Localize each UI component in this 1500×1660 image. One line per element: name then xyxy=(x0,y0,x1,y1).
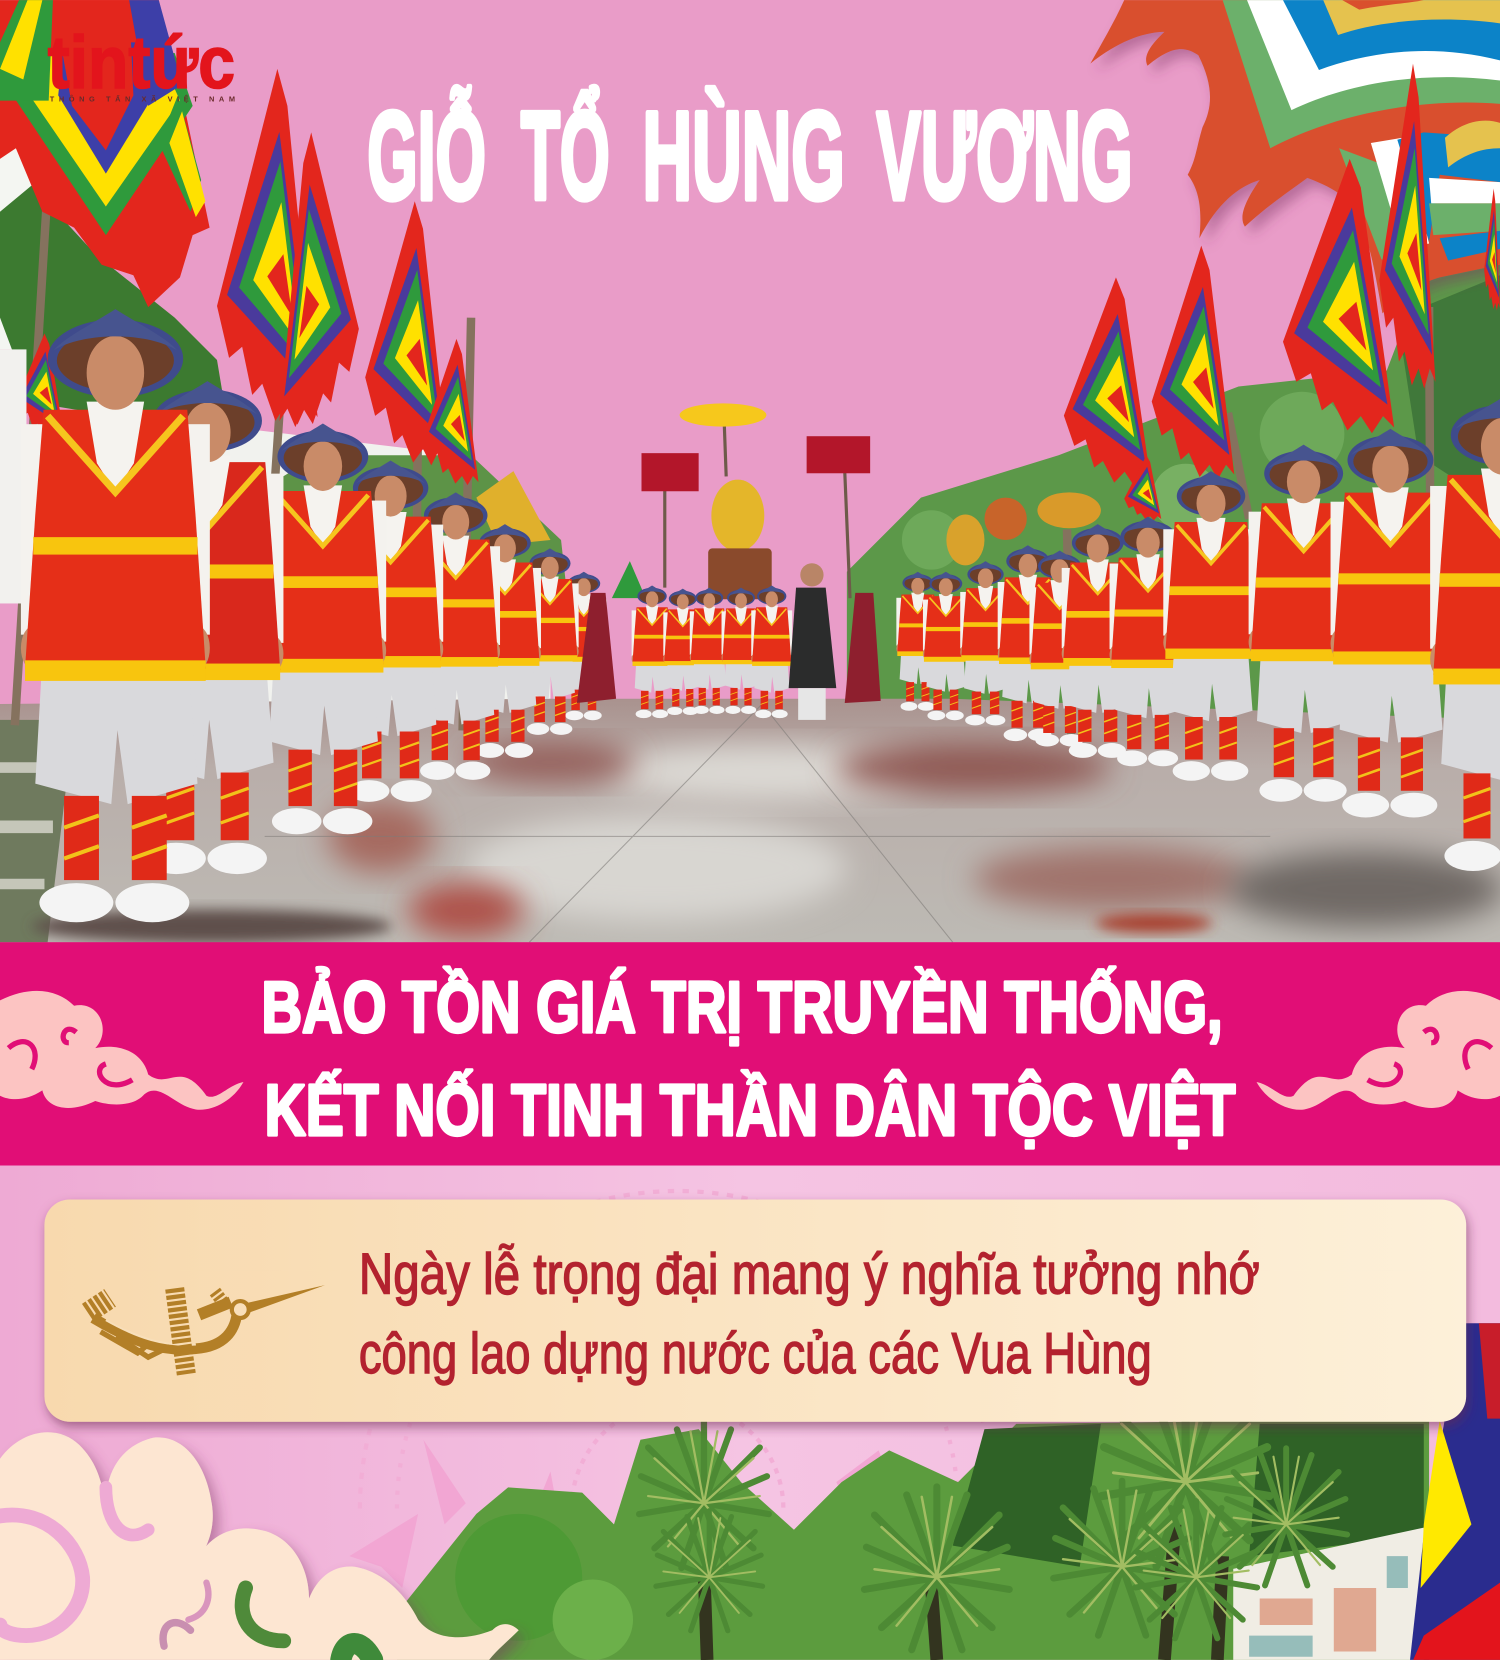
right triangular flags xyxy=(1064,64,1500,520)
lower pink patterned background xyxy=(0,1166,1500,1660)
pavement xyxy=(0,699,1500,943)
left big chevron flag xyxy=(0,0,210,307)
right red banner xyxy=(807,436,870,473)
title: TỔ xyxy=(521,87,610,226)
man in black robe xyxy=(789,563,836,720)
bottom tree photo xyxy=(397,1377,1429,1660)
parasol xyxy=(680,403,766,427)
title: VƯƠNG xyxy=(876,87,1133,226)
card line 2: công lao dựng nước của các Vua Hùng xyxy=(359,1322,1152,1386)
palanquin xyxy=(708,548,772,599)
message card xyxy=(44,1199,1466,1422)
cloud ornament left xyxy=(0,991,243,1110)
flag poles xyxy=(15,101,1431,746)
golden statue xyxy=(711,480,764,552)
subtitle line 1: BẢO TỒN GIÁ TRỊ TRUYỀN THỐNG, xyxy=(261,966,1223,1048)
magenta subtitle band xyxy=(0,942,1500,1166)
far row of marchers xyxy=(469,517,1186,766)
logo xyxy=(48,21,235,104)
background foliage and sky xyxy=(0,148,1500,741)
logo wordmark: tintức xyxy=(48,21,235,104)
logo tagline: THÔNG TẤN XÃ VIỆT NAM xyxy=(50,94,235,104)
card line 1: Ngày lễ trọng đại mang ý nghĩa tưởng nhớ xyxy=(359,1243,1260,1307)
icon: Dong Son bird xyxy=(88,1285,325,1374)
title: GIỖ xyxy=(367,87,486,226)
cloud ornament right xyxy=(1257,991,1500,1110)
left triangular flags xyxy=(16,69,478,485)
top right ornamental banner xyxy=(1090,0,1500,313)
pink background xyxy=(0,0,1500,942)
cream cloud bottom left xyxy=(0,1432,519,1660)
bottom right flag xyxy=(1410,1323,1500,1660)
mural wall xyxy=(1233,1528,1424,1660)
subtitle line 2: KẾT NỐI TINH THẦN DÂN TỘC VIỆT xyxy=(265,1069,1235,1151)
left red banner xyxy=(641,453,699,491)
card message xyxy=(359,1243,1260,1386)
edge sleeve xyxy=(0,349,26,603)
right marchers xyxy=(1163,397,1500,871)
central palanquin with parasol and banners xyxy=(476,403,1101,599)
orange flame shape xyxy=(1090,0,1500,313)
left marchers xyxy=(0,309,500,922)
center dignitaries xyxy=(577,563,881,720)
title: HÙNG xyxy=(643,87,845,226)
front marcher xyxy=(21,309,210,922)
subtitle xyxy=(261,966,1235,1151)
title xyxy=(367,87,1133,226)
banner chevron stripes xyxy=(1223,0,1500,265)
